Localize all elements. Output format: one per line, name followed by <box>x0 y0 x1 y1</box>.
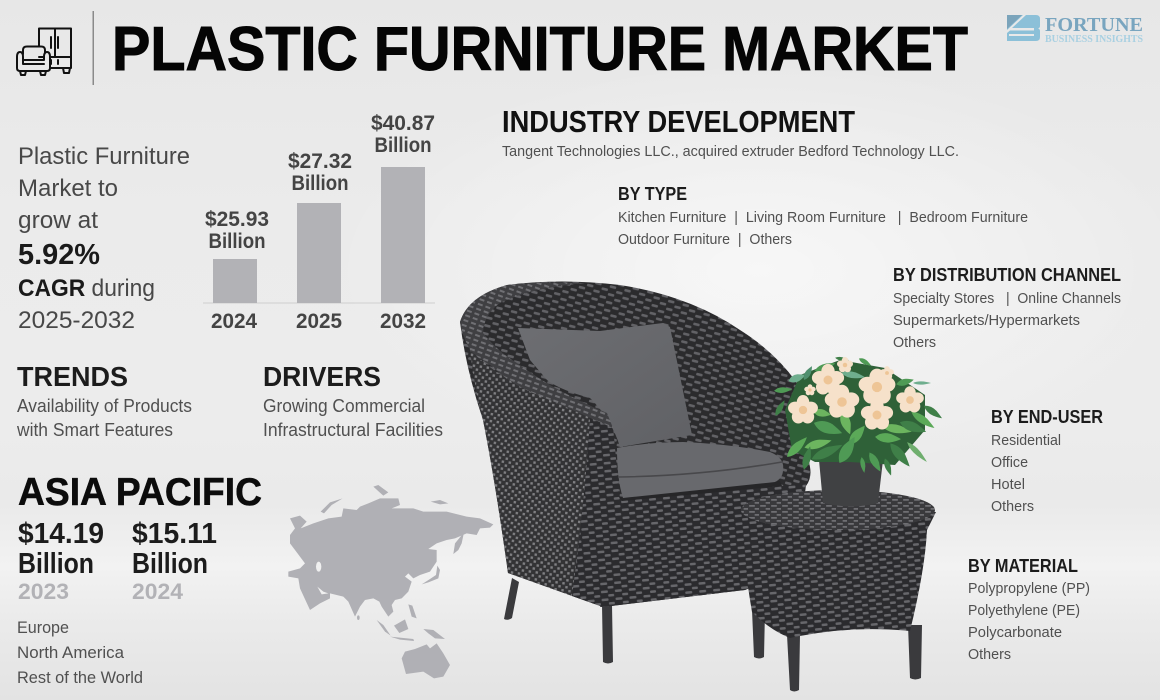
segment: by distribution channel: BY DISTRIBUTION CHANNEL <box>893 265 1121 285</box>
heading: industry development: INDUSTRY DEVELOPMENT <box>502 104 855 139</box>
bar 2024 <box>213 259 257 303</box>
segment: by material: Others <box>968 646 1011 663</box>
segment: by type: Outdoor Furniture | Others <box>618 231 792 248</box>
table legs <box>752 610 922 692</box>
chair legs <box>504 578 613 664</box>
segment: by material <box>968 556 1090 663</box>
bar chart <box>203 112 435 333</box>
bar 2032 <box>381 167 425 303</box>
drivers: Growing Commercial <box>263 396 425 416</box>
regional value 2024: Billion <box>132 548 208 580</box>
value labels: Billion <box>208 230 266 253</box>
logo: Fortune Business Insights <box>1007 14 1143 45</box>
other regions <box>17 618 143 687</box>
trends <box>16 361 192 440</box>
regional value 2023: 2023 <box>18 579 69 604</box>
chair outer side <box>470 350 613 607</box>
chair shell <box>460 282 810 607</box>
segment: by material: BY MATERIAL <box>968 556 1078 576</box>
value labels: $40.87 <box>371 112 435 135</box>
year labels: 2032 <box>380 310 426 333</box>
segment: by type <box>618 184 1028 248</box>
drivers: DRIVERS <box>263 361 381 392</box>
logo mark <box>1007 15 1040 41</box>
other regions: Rest of the World <box>17 668 143 687</box>
illustration: wicker chair, table and plant <box>460 282 944 692</box>
value labels <box>205 112 435 253</box>
segment: by end-user: Hotel <box>991 476 1025 493</box>
regional value 2023: Billion <box>18 548 94 580</box>
plant <box>773 356 944 506</box>
regional value 2023 <box>18 518 104 604</box>
year labels: 2025 <box>296 310 342 333</box>
segment: by end-user <box>991 407 1103 515</box>
segment: by material: Polycarbonate <box>968 624 1062 641</box>
segment: by material: Polyethylene (PE) <box>968 602 1080 619</box>
CAGR text block <box>18 143 190 334</box>
leaves <box>773 356 944 476</box>
CAGR text block: Plastic Furniture <box>18 143 190 170</box>
icon: furniture <box>17 28 71 75</box>
chair front panel <box>572 418 806 607</box>
divider <box>92 11 94 85</box>
map: Asia Pacific <box>288 485 493 678</box>
value labels: Billion <box>292 172 348 195</box>
regional value 2024: 2024 <box>132 579 184 604</box>
segment: by end-user: BY END-USER <box>991 407 1103 427</box>
segment: by distribution channel: Specialty Stores | Online Channels <box>893 290 1121 307</box>
value labels: Billion <box>374 134 432 157</box>
segment: by distribution channel: Others <box>893 334 936 351</box>
regional value 2023: $14.19 <box>18 518 104 550</box>
drivers <box>263 361 443 440</box>
regional value 2024: $15.11 <box>132 518 217 550</box>
segment: by end-user: Residential <box>991 432 1061 449</box>
year labels <box>211 310 426 333</box>
title: PLASTIC FURNITURE MARKET <box>112 15 968 84</box>
segment: by material: Polypropylene (PP) <box>968 580 1090 597</box>
table top <box>741 490 935 530</box>
seat cushion <box>617 442 783 501</box>
flowers <box>788 357 924 430</box>
chair rim <box>460 282 613 428</box>
trends: TRENDS <box>17 361 128 392</box>
CAGR text block: 5.92% <box>18 239 100 271</box>
segment: by distribution channel <box>893 265 1121 351</box>
bar 2025 <box>297 203 341 303</box>
segment: by end-user: Others <box>991 498 1034 515</box>
regional heading: ASIA PACIFIC <box>18 471 262 514</box>
axis <box>203 302 435 304</box>
pot <box>819 460 883 506</box>
segment: by end-user: Office <box>991 454 1028 471</box>
table <box>741 490 936 692</box>
other regions: North America <box>17 643 125 662</box>
CAGR text block: CAGR during <box>18 275 155 302</box>
segment: by type: BY TYPE <box>618 184 687 204</box>
CAGR text block: Market to <box>18 175 118 202</box>
back pillow <box>518 323 692 447</box>
trends: with Smart Features <box>16 420 173 440</box>
segment: by distribution channel: Supermarkets/Hypermarkets <box>893 312 1080 329</box>
value labels: $27.32 <box>288 150 352 173</box>
chair <box>460 282 810 664</box>
table body <box>741 510 936 638</box>
trends: Availability of Products <box>17 396 192 416</box>
CAGR text block: grow at <box>18 207 98 234</box>
value labels: $25.93 <box>205 208 269 231</box>
drivers: Infrastructural Facilities <box>263 420 443 440</box>
industry development text: Tangent Technologies LLC., acquired extruder Bedford Technology LLC. <box>502 143 959 160</box>
segment: by type: Kitchen Furniture | Living Room Furniture | Bedroom Furniture <box>618 209 1028 226</box>
regional value 2024 <box>132 518 217 604</box>
year labels: 2024 <box>211 310 257 333</box>
logo tagline: BUSINESS INSIGHTS <box>1045 34 1143 45</box>
other regions: Europe <box>17 618 69 637</box>
logo name: FORTUNE <box>1045 14 1143 36</box>
foliage mass <box>785 360 925 465</box>
CAGR text block: 2025-2032 <box>18 307 135 334</box>
